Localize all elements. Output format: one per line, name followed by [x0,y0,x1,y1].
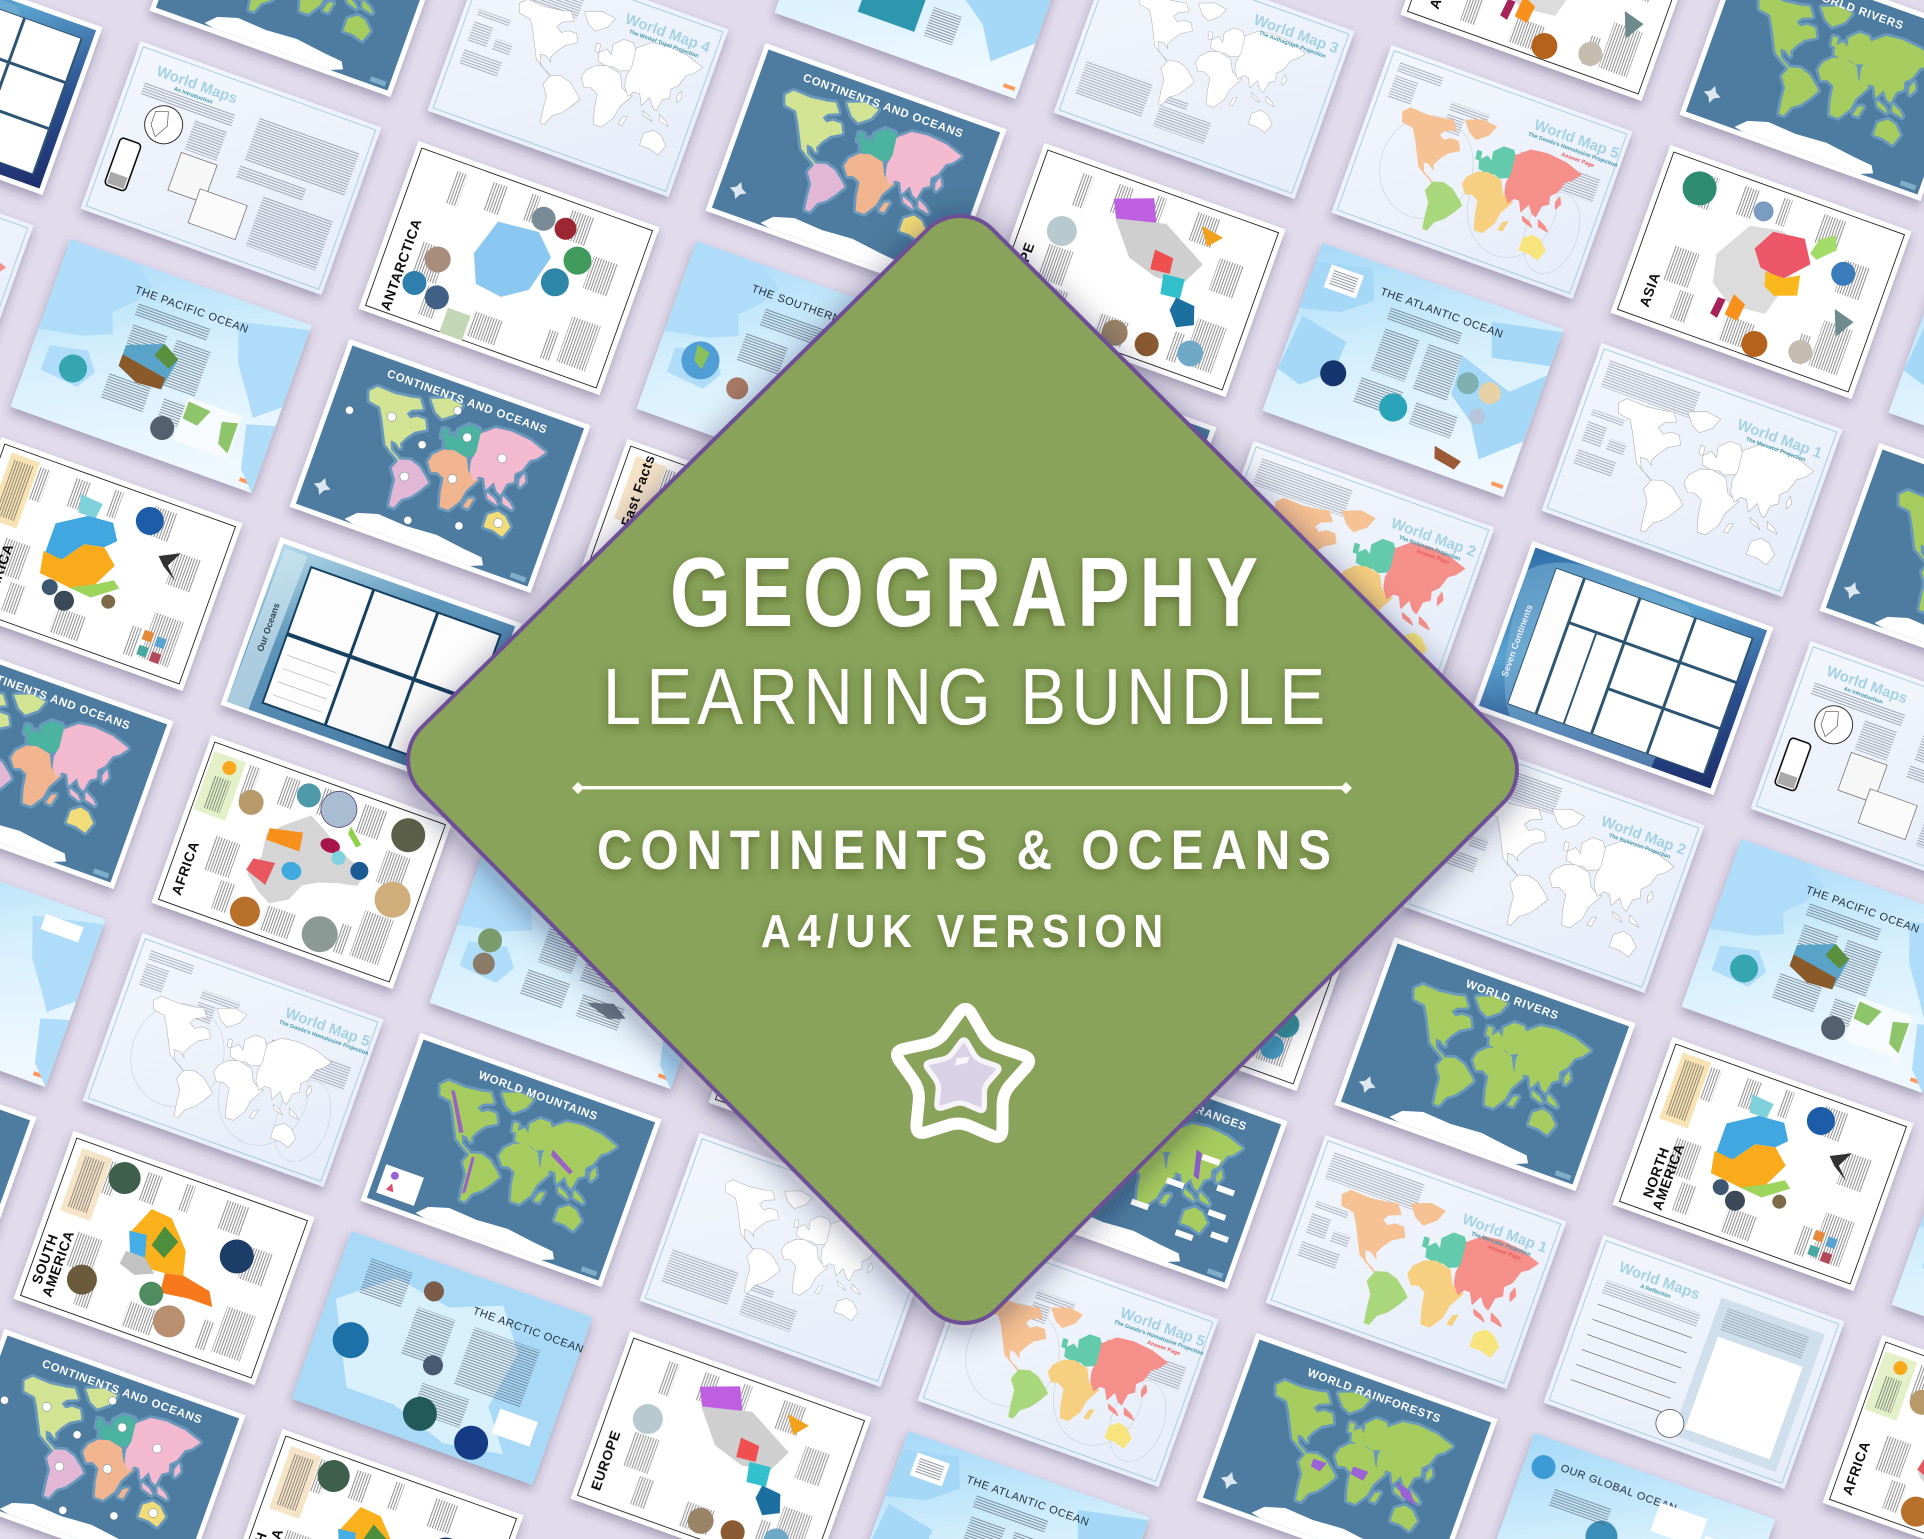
card: answer World Map 1: The Mercator Projection [1470,1231,1532,1258]
card: Europe, lower [570,1331,872,1539]
card: Southern Ocean: THE SOUTHERN OCEAN [750,283,885,341]
card: world rainforests [1196,1333,1498,1539]
card: World Maps reflection [1543,1235,1845,1489]
card: Southern Ocean [636,241,938,495]
card: Arctic Ocean: THE ARCTIC OCEAN [471,1305,586,1356]
card: Atlantic Ocean [1262,243,1564,497]
card: Antarctica [358,141,660,395]
card: continents and oceans with dots, bottom [0,1329,246,1539]
card: continents and oceans with dots: CONTINENTS AND OCEANS [385,368,549,437]
card: South America [13,1131,315,1385]
card: Our Global Ocean: OUR GLOBAL OCEAN [1559,1462,1679,1515]
card: answer World Map 1: World Map 1 [1460,1211,1549,1257]
card: world rivers, top right [1679,0,1924,201]
card: answer World Map 2: The Robinson Projection [1398,535,1462,563]
card: ocean, left edge [0,833,106,1087]
card: answer World Map 5, lower: Answer Page [1146,1340,1181,1357]
card: World Maps introduction [80,41,382,295]
card: Africa [151,735,453,989]
card: World Maps reflection: A Reflection [1639,1284,1672,1300]
card: seven continents panel: Seven Continents [1499,603,1535,678]
card: answer World Map 5, lower [917,1233,1219,1487]
card: outline World Map 5 [82,933,384,1187]
card: outline World Map 1: World Map 1 [1735,416,1824,462]
card: Africa, lower right [1822,1335,1924,1539]
card: outline World Map 5: World Map 5 [283,1004,372,1050]
card: world mountains: WORLD MOUNTAINS [477,1070,599,1123]
card: World Maps introduction, right [1750,641,1924,895]
diamond panel [408,216,1517,1323]
card: World Maps introduction, right: An Introduction [1843,686,1884,706]
card: World Maps introduction: An Introduction [173,86,214,106]
card: outline World Map 4: World Map 4 [623,11,713,57]
card: blue map, right edge [1819,443,1924,697]
card: answer World Map 2 [1193,441,1495,695]
card: world rainforests: WORLD RAINFORESTS [1306,1367,1442,1426]
card: answer World Map 1 [1265,1135,1567,1389]
card: North America [0,437,243,691]
card: outline World Map 2: The Robinson Projection [1608,833,1672,861]
heading: A4/UK version: A4/UK VERSION [761,906,1163,958]
card: Asia, top [1400,0,1702,101]
card: fast facts sheet [567,439,869,693]
card: outline World Map 2 [1403,739,1705,993]
card: oceans research panel [220,537,522,791]
card: answer sheet, left edge [0,139,34,393]
card: fast facts sheet, bottom [222,1429,524,1539]
card: answer World Map 2: Answer Page [1416,549,1450,566]
card: oceans research panel: Our Oceans [255,602,282,653]
title text group [597,538,1331,958]
card: ocean, right edge [1888,245,1924,499]
card: outline World Map 3, lower: World Map 3 [837,1199,927,1245]
card: answer World Map 1: Answer Page [1487,1245,1521,1262]
card: answer World Map 5 [1331,45,1633,299]
card: outline World Map 4: The Winkel Tripel Projection [628,29,700,60]
card: Indian Ocean [429,835,731,1089]
card: answer World Map 5: Answer Page [1560,152,1595,169]
card: world mountain ranges [986,1035,1288,1289]
card: outline World Map 3 [1053,0,1355,199]
card: ocean, lower right edge [1891,1137,1924,1391]
card: world rivers [1334,937,1636,1191]
card: continents and oceans, coloured, left [0,635,174,889]
card: outline World Map 3: The Authagraph Projection [1258,30,1327,60]
card: outline World Map 3, lower: The Authagraph Projection [844,1218,913,1248]
card: outline World Map 4 [427,0,729,197]
card: Arctic Ocean [291,1231,595,1486]
card: Atlantic Ocean, lower [848,1431,1150,1539]
card: continents and oceans, coloured: CONTINENTS AND OCEANS [801,72,965,141]
card: Our Global Ocean [1474,1433,1776,1539]
card: seven continents panel [1472,541,1774,795]
card: answer World Map 2: World Map 2 [1389,515,1478,561]
subtitle: Learning Bundle: LEARNING BUNDLE [603,651,1325,741]
card: ocean map, top [774,0,1076,99]
card: outline World Map 1: The Mercator Projection [1745,437,1807,464]
card: World Maps introduction, right: World Maps [1824,663,1910,707]
card: world map top left [149,0,451,97]
card: answer World Map 5: World Map 5 [1532,116,1621,162]
card: continents and oceans with dots, bottom: CONTINENTS AND OCEANS [40,1358,204,1427]
card: answer World Map 5: The Goode's Homolosine Projection [1527,132,1619,169]
card: research panel, top left [0,0,103,195]
card: blue map behind diamond [915,341,1217,595]
card: fast facts sheet: Fast Facts [618,452,658,529]
card: outline World Map 3, lower [639,1133,941,1387]
heading: Continents & Oceans: CONTINENTS & OCEANS [597,819,1331,882]
card: outline World Map 1 [1541,343,1843,597]
card: World Maps introduction: World Maps [154,63,240,107]
card: Antarctica: ANTARCTICA [377,216,425,313]
card: outline World Map 2: World Map 2 [1599,813,1688,859]
card: Asia [1610,145,1912,399]
card: Pacific Ocean, right [1681,839,1924,1093]
card: hidden worksheet [1055,837,1357,1091]
card: world mountains [360,1033,662,1287]
card: answer World Map 5, lower: The Goode's Homolosine Projection [1113,1320,1205,1357]
diamond shape [408,216,1517,1323]
card: outline World Map 5: The Goode's Homolosine Projection [278,1020,370,1057]
card: continents and oceans, coloured [705,43,1007,297]
card: Europe [984,143,1286,397]
card: North America, right [1612,1037,1914,1291]
card: blue map, left edge [0,1031,37,1285]
card: answer World Map 5, lower: World Map 5 [1118,1304,1207,1350]
card: outline World Map 3: World Map 3 [1251,11,1341,57]
card: white sheet behind diamond [708,935,1010,1189]
card: continents and oceans with dots [289,339,591,593]
icon: star [893,1005,1032,1138]
divider line with diamond ends [572,782,1352,794]
card: World Maps reflection: World Maps [1617,1259,1702,1303]
card: world rivers: WORLD RIVERS [1464,978,1560,1023]
card: world mountain ranges: WORLD MOUNTAIN RANGES [1080,1063,1248,1134]
title: Geography: GEOGRAPHY [670,538,1258,647]
card: Pacific Ocean [10,239,312,493]
